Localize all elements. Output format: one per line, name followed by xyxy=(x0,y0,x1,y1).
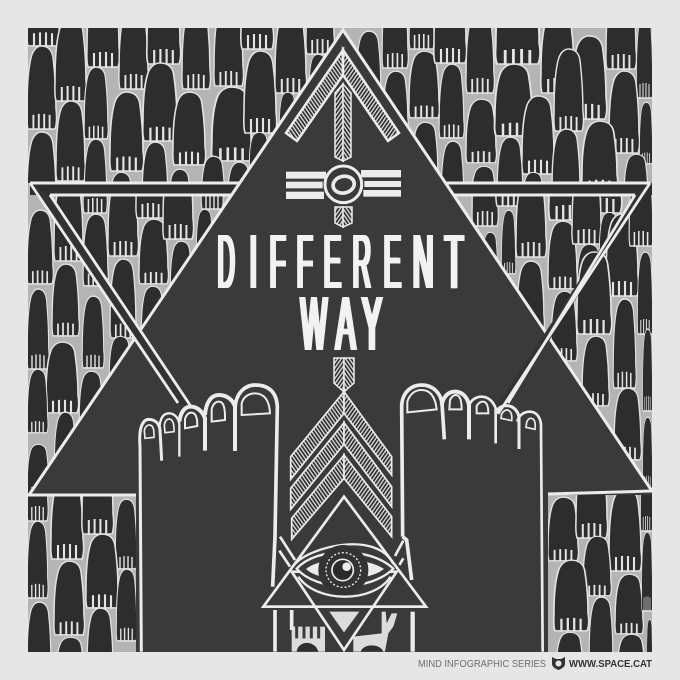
bottom strip feet xyxy=(292,612,397,652)
left big foot xyxy=(140,385,292,652)
title: WAY xyxy=(299,281,384,367)
top chevron xyxy=(286,50,399,141)
title: WAY: Y xyxy=(360,281,380,367)
hatched chevrons xyxy=(291,392,392,539)
title: DIFFERENT: F xyxy=(268,219,284,305)
title: DIFFERENT: F xyxy=(295,219,311,305)
right big foot xyxy=(402,385,543,652)
sun symbol with bars xyxy=(286,166,401,203)
title: DIFFERENT: D xyxy=(216,219,233,305)
triangle outline xyxy=(29,30,652,495)
title: DIFFERENT xyxy=(216,219,465,305)
title: WAY: W xyxy=(299,281,325,367)
eye xyxy=(295,544,393,597)
vertical arrow xyxy=(335,84,351,161)
small arrow under sun xyxy=(335,207,352,227)
title: DIFFERENT: I xyxy=(248,219,255,305)
foot pattern: lower rows xyxy=(27,439,653,680)
solid small triangle xyxy=(329,612,359,632)
base line of eye triangle xyxy=(263,603,426,611)
title: DIFFERENT: N xyxy=(411,219,432,305)
upward triangle around eye xyxy=(263,497,426,607)
title: DIFFERENT: R xyxy=(351,219,369,305)
lower art group in zoom coordinates xyxy=(140,385,543,652)
foot pattern: middle rows xyxy=(27,124,653,496)
small arrow above chevrons xyxy=(334,358,354,392)
footer: cat logo icon xyxy=(552,657,565,670)
title: DIFFERENT: T xyxy=(442,219,461,305)
eye triangle stubs xyxy=(279,537,403,567)
footer: series label: MIND INFOGRAPHIC SERIES xyxy=(418,659,546,670)
inverted triangle: diagonal double lines xyxy=(30,183,650,414)
title: DIFFERENT: E xyxy=(322,219,339,305)
footer: website: WWW.SPACE.CAT xyxy=(569,659,652,670)
title: WAY: A xyxy=(334,281,354,367)
downward triangle around eye xyxy=(292,572,397,650)
title: DIFFERENT: E xyxy=(382,219,399,305)
foot pattern: upper rows xyxy=(28,28,652,183)
inverted triangle: top band xyxy=(30,183,652,195)
